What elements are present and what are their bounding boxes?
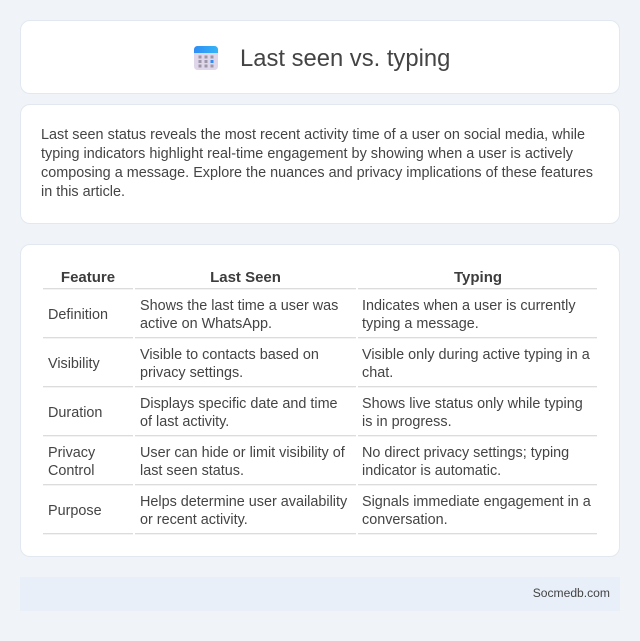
row: Visibility: Visible to contacts based on bbox=[140, 347, 319, 363]
table header: Feature: Feature bbox=[61, 269, 115, 286]
row: Visibility: chat. bbox=[362, 365, 393, 381]
icon: calendar bbox=[194, 46, 218, 70]
row: Definition: Indicates when a user is currently bbox=[362, 298, 576, 314]
panel: title card bbox=[20, 20, 620, 94]
table header: Typing: Typing bbox=[454, 269, 502, 286]
row: Duration: of last activity. bbox=[140, 414, 229, 430]
row: Definition: typing a message. bbox=[362, 316, 479, 332]
row: Purpose: Purpose bbox=[48, 503, 102, 519]
text block: introduction: Last seen status reveals the most recent activity time of a user on social media, while bbox=[41, 127, 585, 143]
row: Duration: Duration bbox=[48, 405, 102, 421]
row: Visibility bbox=[48, 347, 590, 381]
footer bar bbox=[20, 577, 620, 611]
row: Definition: Shows the last time a user was bbox=[140, 298, 338, 314]
row: Privacy Control: Privacy bbox=[48, 445, 95, 461]
row: Purpose: Signals immediate engagement in a bbox=[362, 494, 591, 510]
table header: Last Seen: Last Seen bbox=[210, 269, 281, 286]
row: Visibility: Visibility bbox=[48, 356, 100, 372]
row: Privacy Control: No direct privacy settings; typing bbox=[362, 445, 569, 461]
row: Privacy Control: indicator is automatic. bbox=[362, 463, 501, 479]
row: Definition bbox=[48, 298, 576, 332]
row: Visibility: Visible only during active typing in a bbox=[362, 347, 590, 363]
row: Privacy Control: User can hide or limit visibility of bbox=[140, 445, 345, 461]
panel: introduction card bbox=[20, 104, 620, 224]
row: Purpose: or recent activity. bbox=[140, 512, 248, 528]
row: Privacy Control bbox=[48, 445, 569, 479]
panel: comparison table card bbox=[20, 244, 620, 557]
text block: introduction bbox=[41, 127, 593, 200]
row: Duration: Shows live status only while typing bbox=[362, 396, 583, 412]
row: Purpose bbox=[48, 494, 591, 528]
row: Duration: is in progress. bbox=[362, 414, 452, 430]
row: Duration: Displays specific date and time bbox=[140, 396, 338, 412]
row: Privacy Control: Control bbox=[48, 463, 94, 479]
row: Duration bbox=[48, 396, 583, 430]
text block: introduction: composing a message. Explore the nuances and privacy implications of these features bbox=[41, 165, 593, 181]
text block: introduction: in this article. bbox=[41, 184, 125, 200]
row: Purpose: conversation. bbox=[362, 512, 448, 528]
row: Definition: Definition bbox=[48, 307, 108, 323]
row: Privacy Control: last seen status. bbox=[140, 463, 244, 479]
row: Visibility: privacy settings. bbox=[140, 365, 243, 381]
title: Last seen vs. typing bbox=[240, 45, 450, 72]
text block: introduction: typing indicators highlight real-time engagement by showing when a user is actively bbox=[41, 146, 573, 162]
row: Definition: active on WhatsApp. bbox=[140, 316, 272, 332]
comparison table bbox=[43, 269, 597, 535]
footer text: Socmedb.com bbox=[533, 586, 610, 600]
row: Purpose: Helps determine user availability bbox=[140, 494, 347, 510]
